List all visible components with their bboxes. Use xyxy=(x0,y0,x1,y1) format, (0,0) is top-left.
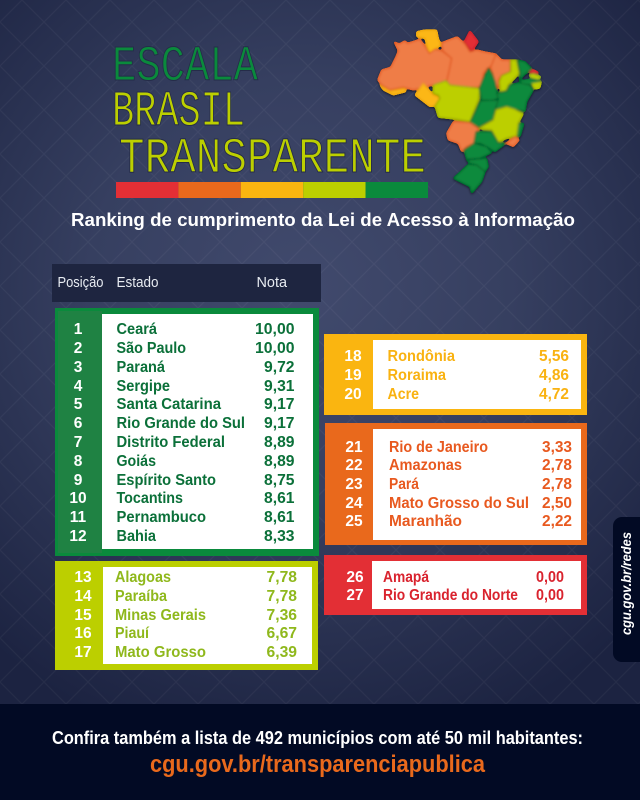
panel: green ranking 1-12: 8,61 xyxy=(264,509,295,526)
panel: orange ranking 21-25: 22 xyxy=(345,457,363,474)
panel: green ranking 1-12: 9,17 xyxy=(264,396,294,413)
panel: green ranking 1-12: Bahia xyxy=(116,528,156,545)
panel: lime ranking 13-17: Piauí xyxy=(115,625,150,642)
panel: red ranking 26-27: 0,00 xyxy=(536,587,564,604)
panel: green ranking 1-12: Santa Catarina xyxy=(116,396,221,413)
panel: green ranking 1-12: 8 xyxy=(74,453,83,470)
side tab: cgu.gov.br/redes: cgu.gov.br/redes xyxy=(618,532,634,635)
panel: green ranking 1-12: 10,00 xyxy=(255,321,294,338)
panel: lime ranking 13-17: 15 xyxy=(74,607,92,624)
panel: red ranking 26-27: Rio Grande do Norte xyxy=(383,587,518,604)
panel: lime ranking 13-17: 7,78 xyxy=(266,569,297,586)
panel: orange ranking 21-25: Rio de Janeiro xyxy=(389,439,488,456)
panel: orange ranking 21-25: Amazonas xyxy=(389,457,462,474)
colour scale bar xyxy=(116,182,428,198)
panel: orange ranking 21-25: 2,50 xyxy=(542,495,572,512)
panel: yellow ranking 18-20: 5,56 xyxy=(539,348,569,365)
table header: Estado xyxy=(116,274,158,291)
panel: red ranking 26-27: Amapá xyxy=(383,569,429,586)
table header xyxy=(52,264,321,302)
panel: lime ranking 13-17: 6,67 xyxy=(266,625,297,642)
panel: orange ranking 21-25: 2,22 xyxy=(542,513,572,530)
panel: orange ranking 21-25: 23 xyxy=(345,476,363,493)
panel: orange ranking 21-25: 2,78 xyxy=(542,457,572,474)
panel: yellow ranking 18-20: Rondônia xyxy=(388,348,455,365)
panel: lime ranking 13-17: 14 xyxy=(74,588,92,605)
panel: red ranking 26-27 xyxy=(324,555,587,615)
panel: green ranking 1-12: 9,72 xyxy=(264,359,294,376)
panel: lime ranking 13-17: 7,36 xyxy=(266,607,297,624)
panel: lime ranking 13-17: 7,78 xyxy=(266,588,297,605)
panel: lime ranking 13-17: Minas Gerais xyxy=(115,607,206,624)
panel: green ranking 1-12: Espírito Santo xyxy=(116,472,216,489)
footer link: cgu.gov.br/transparenciapublica xyxy=(150,751,486,778)
panel: green ranking 1-12: 7 xyxy=(74,434,82,451)
panel: green ranking 1-12: Tocantins xyxy=(116,490,183,507)
panel: orange ranking 21-25: 25 xyxy=(345,513,363,530)
panel: orange ranking 21-25: Pará xyxy=(389,476,419,493)
panel: yellow ranking 18-20: 19 xyxy=(344,367,362,384)
panel: green ranking 1-12: 8,33 xyxy=(264,528,295,545)
panel: green ranking 1-12: 3 xyxy=(74,359,83,376)
panel: green ranking 1-12: Rio Grande do Sul xyxy=(116,415,245,432)
panel: green ranking 1-12: 8,75 xyxy=(264,472,295,489)
title: BRASIL xyxy=(112,84,245,141)
title xyxy=(112,39,426,188)
panel: yellow ranking 18-20: 18 xyxy=(344,348,362,365)
panel: yellow ranking 18-20: Acre xyxy=(388,386,419,403)
panel: green ranking 1-12: 4 xyxy=(74,378,83,395)
panel: lime ranking 13-17: Alagoas xyxy=(115,569,171,586)
panel: orange ranking 21-25: Mato Grosso do Sul xyxy=(389,495,529,512)
panel: orange ranking 21-25 xyxy=(325,423,587,545)
panel: green ranking 1-12: 9 xyxy=(74,472,83,489)
subtitle: Ranking de cumprimento da Lei de Acesso à Informação xyxy=(71,209,575,230)
panel: orange ranking 21-25: 3,33 xyxy=(542,439,572,456)
panel: lime ranking 13-17: 6,39 xyxy=(266,644,297,661)
panel: orange ranking 21-25: 24 xyxy=(345,495,363,512)
table header: Posição xyxy=(58,274,104,291)
panel: lime ranking 13-17: Mato Grosso xyxy=(115,644,206,661)
panel: green ranking 1-12: São Paulo xyxy=(116,340,186,357)
panel: green ranking 1-12: 9,31 xyxy=(264,378,295,395)
panel: green ranking 1-12: Paraná xyxy=(116,359,165,376)
footer text: Confira também a lista de 492 municípios com até 50 mil habitantes: xyxy=(52,728,583,748)
side tab: cgu.gov.br/redes xyxy=(613,517,640,662)
panel: green ranking 1-12: Ceará xyxy=(116,321,157,338)
panel: green ranking 1-12: 8,89 xyxy=(264,453,295,470)
panel: green ranking 1-12: Pernambuco xyxy=(116,509,206,526)
panel: green ranking 1-12: Sergipe xyxy=(116,378,170,395)
panel: lime ranking 13-17: 17 xyxy=(74,644,92,661)
panel: yellow ranking 18-20 xyxy=(324,334,587,415)
panel: green ranking 1-12: 8,61 xyxy=(264,490,295,507)
panel: orange ranking 21-25: Maranhão xyxy=(389,513,462,530)
panel: green ranking 1-12: 6 xyxy=(74,415,83,432)
panel: yellow ranking 18-20: 4,86 xyxy=(539,367,569,384)
panel: yellow ranking 18-20: 20 xyxy=(344,386,362,403)
table header: Nota xyxy=(256,274,288,291)
panel: orange ranking 21-25: 21 xyxy=(345,439,363,456)
panel: green ranking 1-12: 11 xyxy=(70,509,87,526)
panel: orange ranking 21-25: 2,78 xyxy=(542,476,572,493)
panel: green ranking 1-12: Goiás xyxy=(116,453,156,470)
panel: green ranking 1-12 xyxy=(55,308,319,556)
panel: green ranking 1-12: 1 xyxy=(74,321,83,338)
panel: yellow ranking 18-20: 4,72 xyxy=(539,386,569,403)
title: ESCALA xyxy=(112,39,258,96)
panel: green ranking 1-12: 12 xyxy=(69,528,87,545)
title: TRANSPARENTE xyxy=(119,131,426,188)
panel: yellow ranking 18-20: Roraima xyxy=(388,367,446,384)
panel: green ranking 1-12: 2 xyxy=(74,340,82,357)
panel: lime ranking 13-17 xyxy=(55,561,318,670)
panel: lime ranking 13-17: 16 xyxy=(74,625,92,642)
panel: lime ranking 13-17: Paraíba xyxy=(115,588,167,605)
panel: red ranking 26-27: 0,00 xyxy=(536,569,564,586)
panel: lime ranking 13-17: 13 xyxy=(74,569,92,586)
panel: green ranking 1-12: 9,17 xyxy=(264,415,294,432)
panel: green ranking 1-12: Distrito Federal xyxy=(116,434,225,451)
map of Brazil xyxy=(378,30,542,193)
panel: green ranking 1-12: 10,00 xyxy=(255,340,294,357)
panel: red ranking 26-27: 26 xyxy=(346,569,364,586)
panel: green ranking 1-12: 10 xyxy=(69,490,87,507)
panel: red ranking 26-27: 27 xyxy=(346,587,364,604)
panel: green ranking 1-12: 8,89 xyxy=(264,434,295,451)
panel: green ranking 1-12: 5 xyxy=(74,396,83,413)
footer band xyxy=(0,704,640,800)
